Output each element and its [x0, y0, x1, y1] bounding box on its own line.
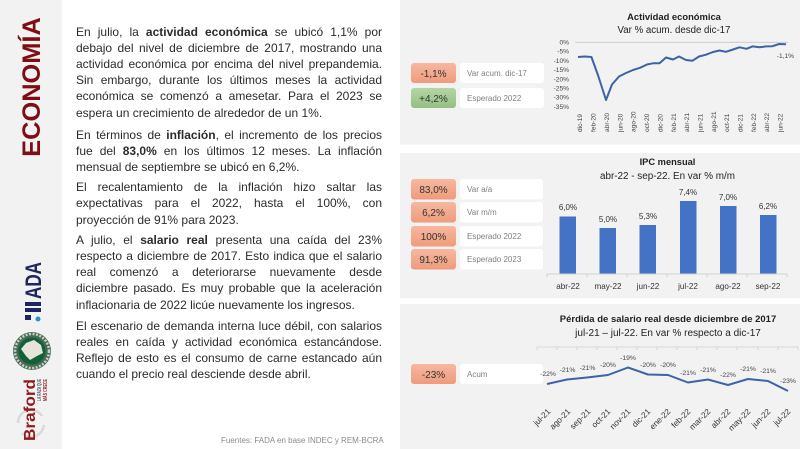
line chart: salario real: ago-21 — [548, 407, 573, 431]
line chart: actividad económica: feb-22 — [751, 113, 758, 132]
panel: actividad económica — [400, 0, 800, 144]
text block: analysis paragraphs: Reflejo de esto es el consumo de carne estancado aún — [76, 351, 382, 365]
line chart: salario real: -22% — [540, 371, 556, 378]
panel: IPC mensual — [400, 153, 800, 298]
line chart: salario real — [531, 347, 798, 433]
text block: analysis paragraphs: diciembre pasado. Es muy probable que la aceleración — [76, 281, 382, 295]
text block: analysis paragraphs: fue del 83,0% en los últimos 12 meses. La inflación — [76, 144, 382, 158]
line chart: salario real: dic-21 — [630, 407, 653, 429]
heading: IPC mensual: IPC mensual — [640, 157, 695, 167]
line chart: salario real: -21% — [740, 366, 756, 373]
heading: actividad económica — [618, 11, 730, 36]
heading: IPC mensual — [600, 157, 735, 182]
line chart: salario real: -21% — [700, 367, 716, 374]
text block: analysis paragraphs: El escenario de demanda interna luce débil, con salarios — [76, 319, 382, 333]
line chart: salario real: feb-22 — [670, 407, 693, 430]
kpi: var acum: Var acum. dic-17 — [467, 69, 527, 78]
line chart: actividad económica: -15% — [554, 67, 569, 74]
bar chart: IPC mensual: ago-22 — [715, 282, 741, 291]
text block: analysis paragraphs: En términos de inflación, el incremento de los precios — [76, 128, 382, 142]
line chart: actividad económica: oct-20 — [644, 113, 651, 132]
line chart: salario real: -21% — [680, 370, 696, 377]
kpi: esperado 2023: 91,3% — [419, 255, 448, 266]
text block: analysis paragraphs: respecto a diciembre de 2017. Esto indica que el salario — [76, 249, 382, 263]
line chart: salario real: oct-21 — [590, 407, 613, 430]
line chart: actividad económica: -1,1% — [777, 53, 794, 60]
text block: analysis paragraphs: inflacionaria de 2022 licúe nuevamente los ingresos. — [76, 298, 355, 312]
line chart: salario real: -19% — [620, 355, 636, 362]
line chart: actividad económica: -10% — [554, 58, 569, 65]
logo: Braford: LA RAZA QUE — [37, 379, 43, 401]
text block: analysis paragraphs: real comenzó a deteriorarse nuevamente desde — [76, 265, 382, 279]
text block: analysis paragraphs — [76, 25, 382, 381]
text block: analysis paragraphs: A julio, el salario real presenta una caída del 23% — [76, 233, 382, 247]
line chart: salario real: mar-22 — [688, 407, 713, 432]
text block: analysis paragraphs: mensual de septiembre se ubicó en 6,2%. — [76, 160, 299, 174]
line chart: actividad económica: -20% — [554, 76, 569, 83]
bar chart: IPC mensual: jul-22 — [677, 282, 698, 291]
kpi: esperado 2022: +4,2% — [419, 94, 448, 105]
kpi: acum: -23% — [422, 370, 445, 381]
line chart: actividad económica: abr-21 — [684, 113, 691, 132]
line chart: actividad económica: dic-19 — [577, 114, 584, 132]
line chart: actividad económica: jun-21 — [698, 113, 704, 133]
source note: Fuentes: FADA en base INDEC y REM-BCRA — [221, 436, 384, 445]
kpi: acum: Acum — [467, 370, 488, 379]
kpi: var acum: -1,1% — [420, 69, 447, 80]
line chart: salario real: -20% — [640, 362, 656, 369]
kpi: esperado 2022: Esperado 2022 — [467, 232, 522, 241]
text block: analysis paragraphs: reales en caída y actividad económica estancándose. — [76, 335, 382, 349]
line chart: actividad económica: dic-21 — [738, 114, 744, 132]
logo: FADA — [21, 262, 46, 322]
text block: analysis paragraphs: El recalentamiento de la inflación hizo saltar las — [76, 180, 382, 194]
heading: salario real: Pérdida de salario real desde diciembre de 2017 — [560, 314, 776, 325]
logo: round seal — [13, 332, 51, 370]
line chart: salario real: sep-21 — [568, 407, 593, 431]
bar chart: IPC mensual: sep-22 — [756, 282, 781, 291]
heading: IPC mensual: abr-22 - sep-22. En var % m/m — [600, 171, 735, 182]
kpi: var acum — [411, 63, 544, 83]
text block: analysis paragraphs: económica se comenzó a amesetar. Para el 2023 se — [76, 89, 382, 103]
line chart: salario real: -21% — [760, 368, 776, 375]
kpi: var m/m: Var m/m — [467, 208, 497, 217]
heading: ECONOMÍA: ECONOMÍA — [18, 17, 46, 157]
panel: salario real — [400, 304, 800, 449]
line chart: salario real: jul-22 — [771, 407, 793, 428]
line chart: salario real: nov-21 — [608, 407, 633, 431]
bar chart: IPC mensual: abr-22 — [556, 282, 580, 291]
line chart: actividad económica: jun-22 — [778, 113, 784, 133]
bar chart: IPC mensual: 5,0% — [599, 215, 617, 224]
line chart: salario real: may-22 — [727, 407, 753, 433]
text block: analysis paragraphs: expectativas para el 2022, hasta el 100%, con — [76, 196, 382, 210]
bar chart: IPC mensual: 5,3% — [639, 212, 657, 221]
bar chart: IPC mensual: 7,4% — [679, 188, 697, 197]
line chart: actividad económica — [554, 40, 794, 133]
heading: actividad económica: Var % acum. desde dic-17 — [618, 25, 730, 36]
bar chart: IPC mensual: 6,2% — [759, 202, 777, 211]
line chart: actividad económica: jun-20 — [618, 113, 624, 133]
bar chart: IPC mensual: may-22 — [594, 282, 622, 291]
kpi: esperado 2023 — [411, 249, 543, 270]
kpi: acum — [411, 364, 543, 384]
kpi: var m/m — [411, 202, 543, 222]
kpi: var a/a: 83,0% — [419, 185, 448, 196]
kpi: esperado 2022 — [411, 88, 544, 108]
heading: actividad económica: Actividad económica — [627, 11, 722, 22]
line chart: salario real: ene-22 — [648, 407, 673, 431]
line chart: salario real: -20% — [660, 362, 676, 369]
kpi: var a/a: Var a/a — [467, 185, 493, 194]
line chart: actividad económica: 0% — [559, 40, 569, 46]
line chart: actividad económica: feb-20 — [590, 113, 598, 132]
kpi: esperado 2022: 100% — [421, 232, 446, 243]
line chart: salario real: -21% — [560, 367, 575, 374]
bar chart: IPC mensual — [547, 188, 787, 291]
line chart: actividad económica: feb-21 — [671, 113, 678, 132]
line chart: actividad económica: -30% — [554, 95, 569, 102]
heading: salario real — [560, 314, 776, 339]
kpi: esperado 2022 — [411, 226, 543, 246]
logo: Braford: MÁS CRECE — [42, 379, 49, 401]
bar chart: IPC mensual: 7,0% — [719, 193, 737, 202]
line chart: actividad económica: ago-21 — [711, 111, 718, 132]
heading: salario real: jul-21 – jul-22. En var % respecto a dic-17 — [574, 328, 761, 339]
line chart: salario real: -23% — [780, 378, 796, 385]
line chart: actividad económica: -5% — [557, 49, 569, 56]
logo: FADA: ADA — [21, 262, 46, 299]
bar chart: IPC mensual: jun-22 — [636, 282, 660, 291]
kpi: esperado 2022: Esperado 2022 — [467, 94, 522, 103]
line chart: actividad económica: abr-22 — [764, 113, 771, 132]
line chart: salario real: -20% — [600, 362, 616, 369]
line chart: salario real: jul-21 — [531, 407, 553, 428]
text block: analysis paragraphs: debajo del nivel de diciembre de 2017, mostrando una — [76, 41, 382, 55]
line chart: salario real: jun-22 — [749, 407, 773, 430]
line chart: actividad económica: ago-20 — [630, 111, 638, 132]
text block: analysis paragraphs: Sin embargo, durante los últimos meses la actividad — [76, 73, 382, 87]
kpi: var m/m: 6,2% — [422, 208, 445, 219]
bar chart: IPC mensual: 6,0% — [559, 203, 577, 212]
line chart: actividad económica: dic-20 — [658, 114, 664, 132]
text block: analysis paragraphs: proyección de 91% para 2023. — [76, 213, 239, 227]
text block: analysis paragraphs: En julio, la actividad económica se ubicó 1,1% por — [76, 25, 382, 39]
line chart: actividad económica: -25% — [554, 86, 569, 92]
line chart: salario real: -22% — [720, 372, 736, 379]
text block: analysis paragraphs: espera un crecimiento de alrededor de un 1%. — [76, 106, 322, 120]
logos — [13, 262, 51, 441]
line chart: salario real: -21% — [580, 365, 595, 372]
line chart: actividad económica: oct-21 — [724, 113, 731, 132]
line chart: actividad económica: -35% — [554, 104, 569, 111]
kpi: esperado 2023: Esperado 2023 — [467, 255, 522, 264]
line chart: actividad económica: abr-20 — [604, 113, 611, 132]
logo: Braford: Braford — [22, 379, 39, 441]
line chart: salario real: abr-22 — [709, 407, 733, 430]
sidebar — [0, 0, 62, 449]
text block: analysis paragraphs: actividad económica por encima del nivel prepandemia. — [76, 57, 382, 71]
logo: Braford — [18, 379, 49, 441]
kpi: var a/a — [411, 179, 543, 200]
text block: analysis paragraphs: cuando el precio real desciende desde abril. — [76, 367, 311, 381]
